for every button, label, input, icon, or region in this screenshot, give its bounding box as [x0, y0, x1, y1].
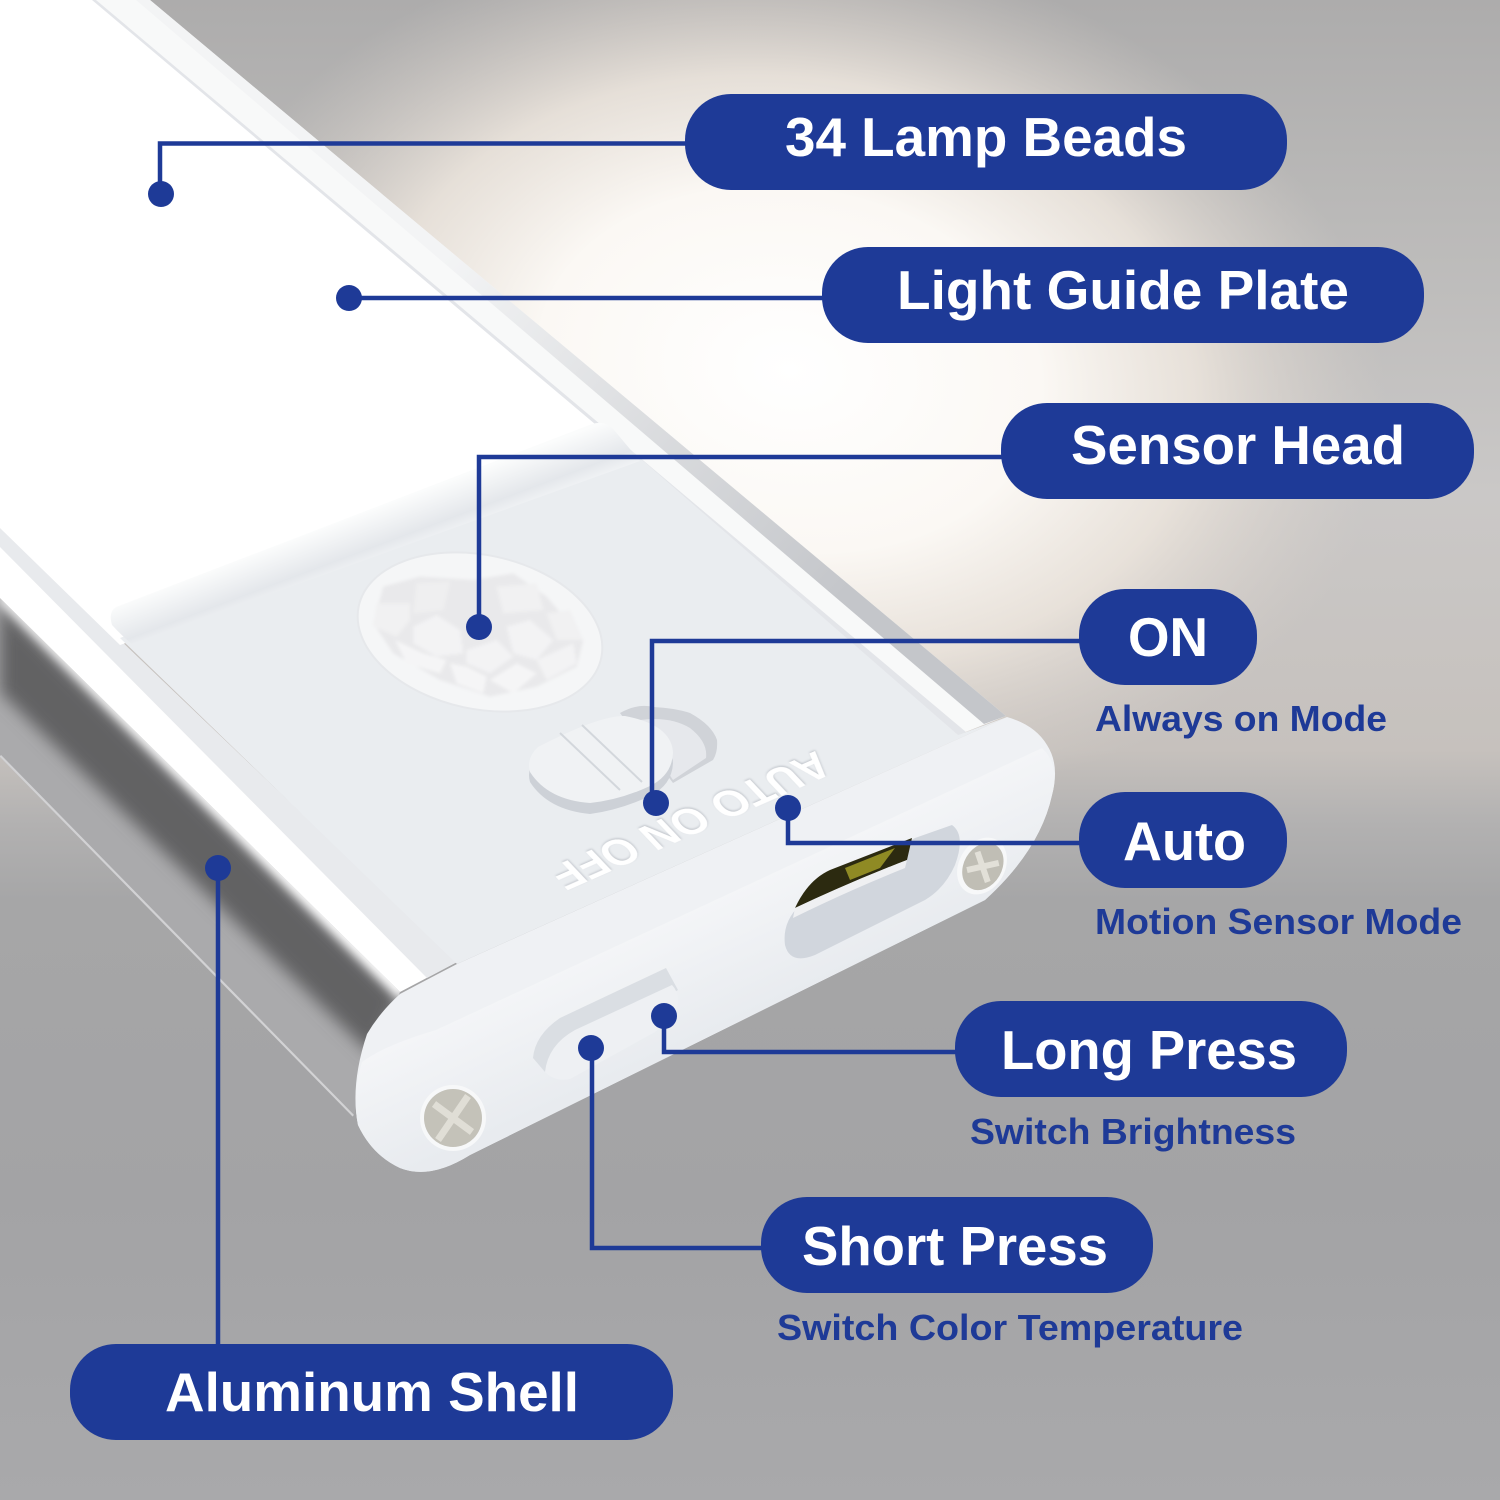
- callout: ON always on mode: Always on Mode: [1095, 698, 1387, 739]
- callout: Light Guide Plate: Light Guide Plate: [897, 259, 1349, 321]
- callout: Sensor Head: [466, 403, 1474, 640]
- callout: Long Press switch brightness: [651, 1001, 1347, 1152]
- left screw: [420, 1085, 486, 1151]
- press button: [533, 968, 678, 1080]
- USB charging port: [785, 825, 960, 958]
- light bar product: [0, 0, 1055, 1172]
- aluminium side: [0, 590, 410, 1130]
- callout: Short Press switch color temperature: Short Press: [802, 1215, 1108, 1277]
- callout: Long Press switch brightness: Switch Brightness: [970, 1111, 1296, 1152]
- callout: Short Press switch color temperature: [578, 1035, 1243, 1348]
- callout: Short Press switch color temperature: Switch Color Temperature: [777, 1307, 1243, 1348]
- callout: Aluminum Shell: [70, 855, 673, 1440]
- callout: Light Guide Plate: [336, 247, 1424, 343]
- callout: Sensor Head: Sensor Head: [1071, 414, 1405, 476]
- slide switch: [529, 706, 717, 814]
- callout: 34 Lamp Beads: [148, 94, 1287, 207]
- left rail: [0, 528, 457, 992]
- glowing light guide panel: [0, 0, 640, 645]
- switch label: AUTO ON OFF: [540, 744, 842, 897]
- callout: Auto motion sensor mode: Auto: [1123, 810, 1246, 872]
- motion sensor lens: [343, 531, 617, 733]
- callout: Long Press switch brightness: Long Press: [1001, 1019, 1297, 1081]
- callout: Auto motion sensor mode: [775, 792, 1462, 942]
- switch knob: [529, 726, 673, 814]
- callout: ON always on mode: ON: [1128, 606, 1208, 668]
- callout: Auto motion sensor mode: Motion Sensor Mode: [1095, 901, 1462, 942]
- switch track: [620, 706, 717, 783]
- end cap front face: [356, 748, 1054, 1172]
- right rail: [88, 0, 1006, 735]
- sensor plate: [120, 445, 1007, 964]
- right screw: [947, 829, 1017, 903]
- callout: Aluminum Shell: Aluminum Shell: [165, 1361, 579, 1423]
- plate raised tab: [111, 423, 640, 644]
- callout: ON always on mode: [643, 589, 1387, 816]
- end cap: [355, 717, 1055, 1172]
- callout: 34 Lamp Beads: 34 Lamp Beads: [785, 106, 1187, 168]
